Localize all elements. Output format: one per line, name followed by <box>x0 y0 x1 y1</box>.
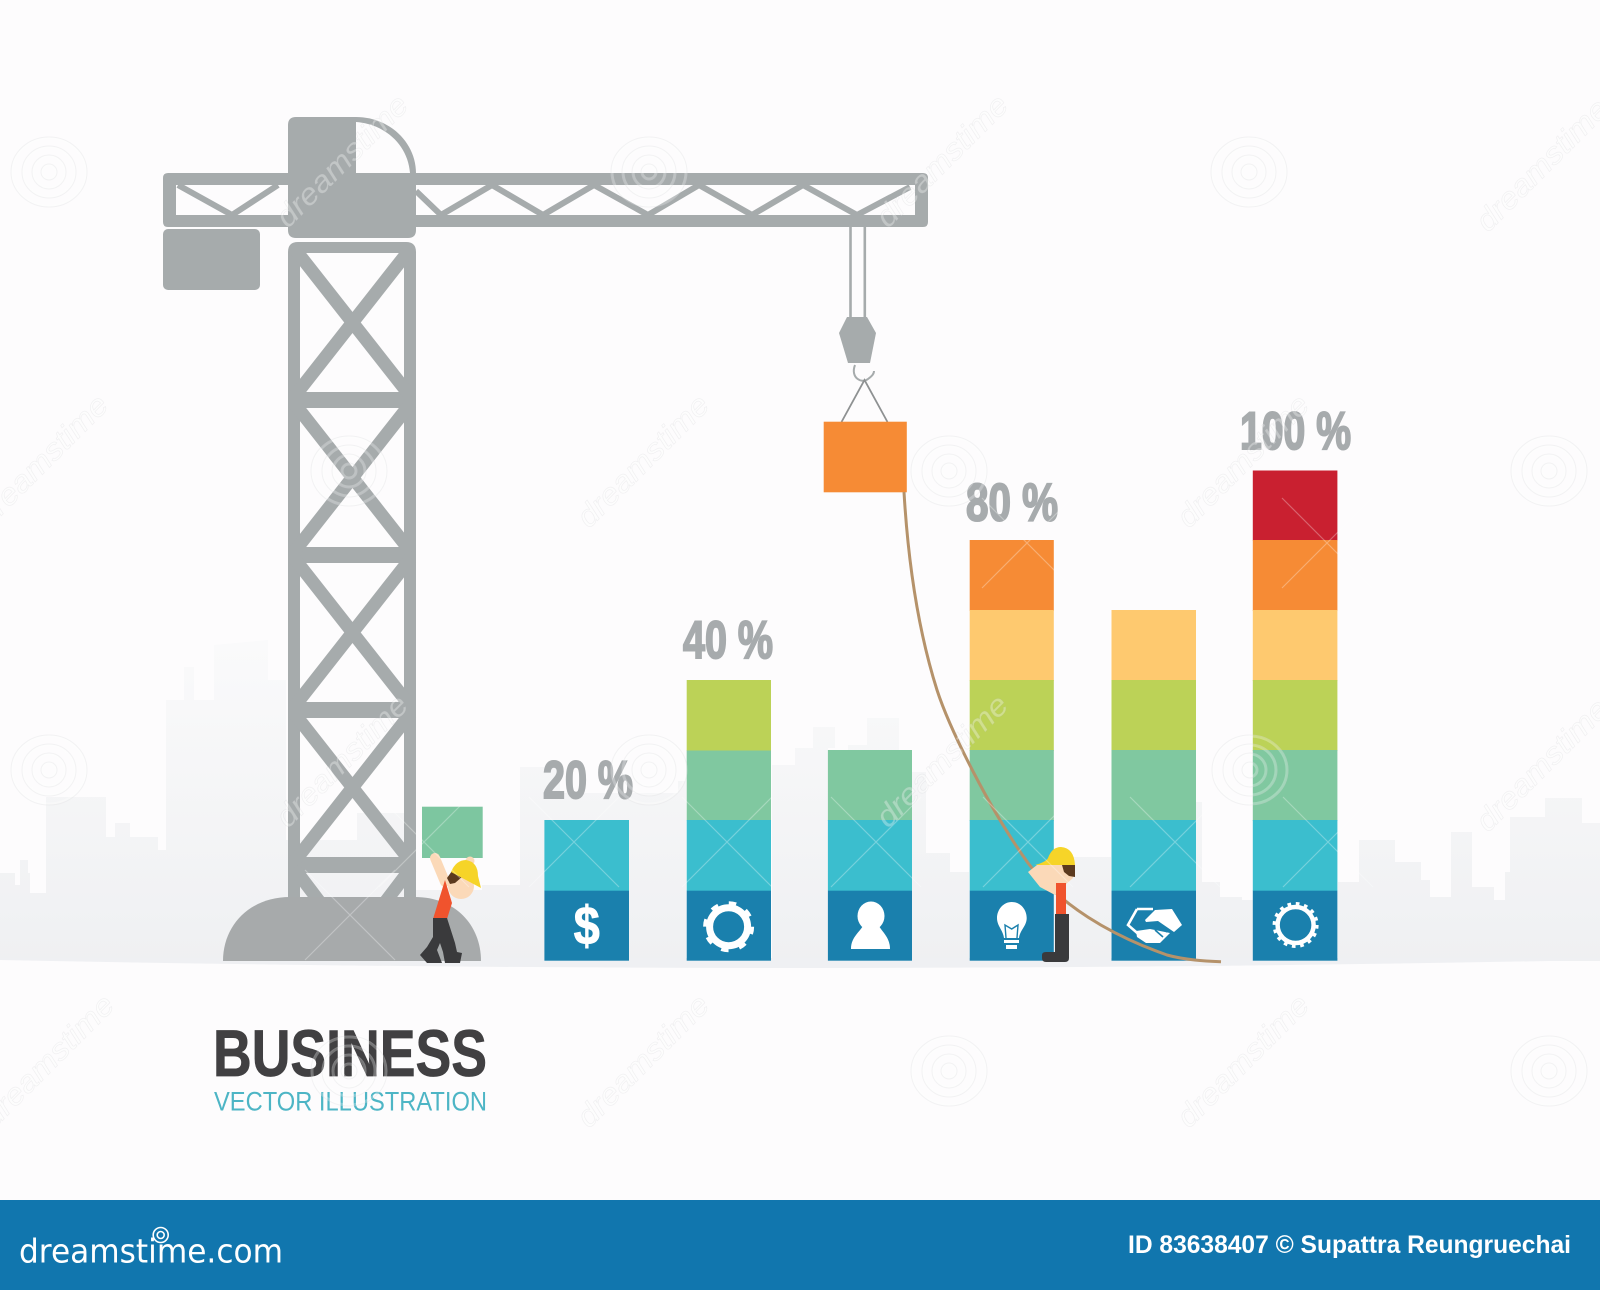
icon: dollar: $ <box>574 896 600 956</box>
footer logo text: dreamstime.com <box>19 1232 283 1271</box>
bar 20 percent <box>544 820 629 961</box>
bar 80 percent <box>970 540 1054 961</box>
icon: gear small <box>1275 904 1317 946</box>
crane cab <box>288 117 416 238</box>
watermark overlay: dreamstime <box>1170 988 1316 1134</box>
label 20 percent: 20 % <box>543 751 633 810</box>
label 100 percent: 100 % <box>1240 402 1351 461</box>
worker pulling rope <box>1028 847 1075 962</box>
watermark overlay: dreamstime <box>570 988 716 1134</box>
watermark overlay: dreamstime <box>1170 388 1316 534</box>
crane jib truss <box>163 173 928 227</box>
heading: business: BUSINESS <box>213 1016 487 1090</box>
background city skyline <box>0 640 1600 961</box>
icon: person <box>851 902 890 949</box>
bar handshake <box>1112 610 1196 961</box>
bar chart <box>544 470 1337 961</box>
watermark overlay: dreamstime <box>869 688 1015 834</box>
icon: light bulb <box>997 902 1027 949</box>
footer credit: ID 83638407 © Supattra Reungruechai <box>1128 1231 1571 1259</box>
counterweight <box>163 229 260 290</box>
icon: gear large <box>707 905 751 949</box>
crane tower <box>288 242 416 905</box>
rope <box>904 492 1221 962</box>
watermark overlay: dreamstime <box>1469 92 1600 238</box>
ground strip <box>0 958 1600 968</box>
carried green block <box>422 807 483 858</box>
icon: handshake <box>1128 909 1182 943</box>
subheading: vector illustration: VECTOR ILLUSTRATION <box>214 1086 487 1116</box>
crane <box>163 117 928 961</box>
footer band <box>0 1200 1600 1290</box>
worker carrying block <box>420 807 483 963</box>
watermark overlay: dreamstime <box>1469 692 1600 838</box>
label 80 percent: 80 % <box>966 474 1058 532</box>
crane base <box>223 897 481 961</box>
bar 40 percent <box>687 680 771 961</box>
footer logo spiral <box>153 1228 168 1242</box>
crane hook and hanging block <box>824 227 907 492</box>
label 40 percent: 40 % <box>683 611 773 670</box>
watermark overlay: dreamstime <box>869 88 1015 234</box>
watermark overlay: dreamstime <box>269 88 415 234</box>
watermark overlay: dreamstime <box>570 388 716 534</box>
bar 100 percent <box>1253 470 1337 961</box>
watermark overlay: dreamstime <box>269 688 415 834</box>
bar person <box>828 750 912 961</box>
